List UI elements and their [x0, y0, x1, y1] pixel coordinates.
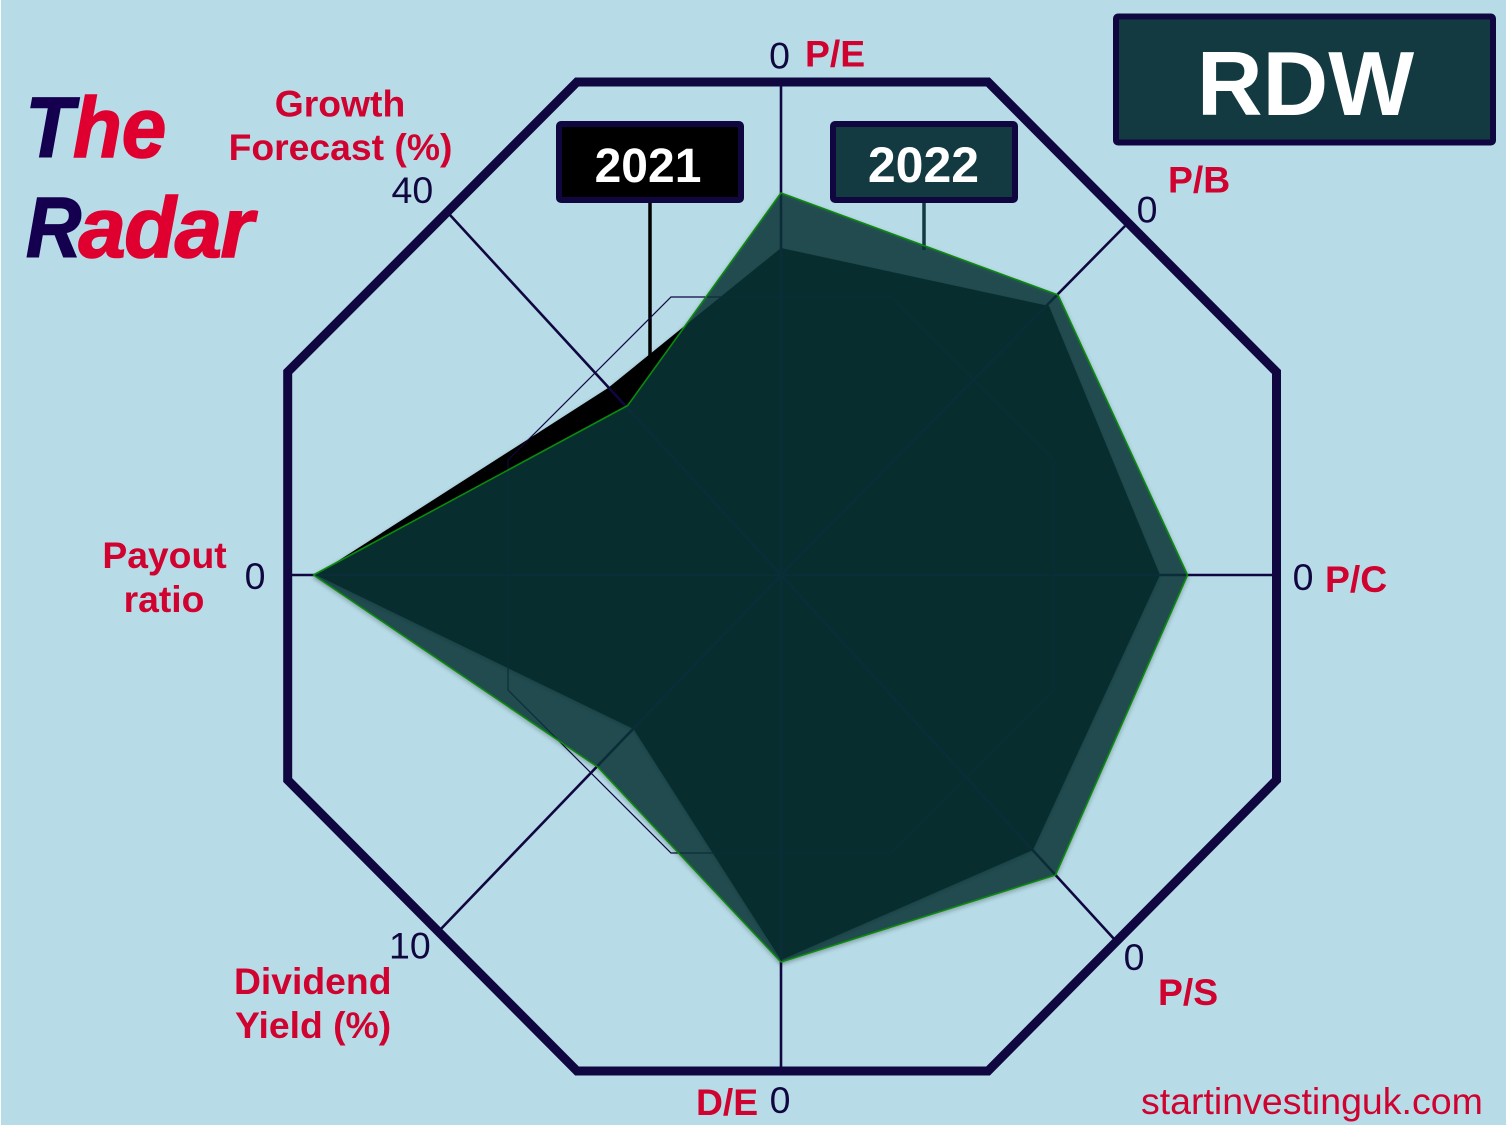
axis label: Growth Forecast: 40 — [392, 169, 433, 211]
ticker box: RDW — [1116, 16, 1493, 142]
title: The Radar: R — [26, 181, 81, 276]
axis label: P/B: P/B — [1168, 158, 1230, 200]
title: The Radar: adar — [78, 181, 257, 276]
axis label: D/E: D/E — [696, 1081, 758, 1123]
legend box: 2022: 2022 — [868, 137, 979, 193]
ticker box: RDW: RDW — [1197, 34, 1414, 135]
axis label: Dividend Yield — [234, 924, 431, 1046]
axis label: P/S: 0 — [1124, 936, 1144, 978]
axis label: Payout ratio: 0 — [245, 555, 265, 597]
axis label: P/S — [1124, 936, 1218, 1013]
title: The Radar: T — [26, 81, 79, 176]
axis label: P/C — [1293, 556, 1387, 600]
axis label: P/E: 0 — [769, 34, 790, 76]
title: The Radar — [26, 81, 257, 276]
stem: 2021 label connector — [648, 200, 652, 358]
axis label: D/E — [696, 1079, 790, 1123]
title: The Radar: he — [73, 81, 166, 176]
axis label: D/E: 0 — [770, 1079, 790, 1121]
legend box: 2021 — [559, 124, 741, 200]
axis label: Growth Forecast: Forecast (%) — [229, 126, 452, 168]
axis label: P/E — [769, 32, 865, 76]
radar series: 2021 — [316, 248, 1160, 960]
axis label: P/S: P/S — [1158, 971, 1218, 1013]
axis label: Growth Forecast: Growth — [275, 82, 405, 124]
axis label: P/C: P/C — [1325, 558, 1387, 600]
radar series: 2022 — [314, 193, 1188, 962]
legend box: 2021: 2021 — [595, 140, 701, 193]
stem: 2022 label connector — [922, 200, 926, 250]
axis label: Dividend Yield: Yield (%) — [235, 1004, 391, 1046]
axis label: Payout ratio: Payout — [102, 534, 227, 576]
axis label: Payout ratio — [102, 534, 265, 620]
axis label: P/B: 0 — [1137, 188, 1157, 230]
website credit: startinvestinguk.com — [1141, 1080, 1483, 1122]
radar outer octagon frame — [288, 82, 1276, 1071]
axis label: Growth Forecast — [229, 82, 452, 211]
axis label: P/B — [1137, 158, 1230, 230]
legend box: 2022 — [833, 124, 1015, 200]
axis label: Dividend Yield: Dividend — [234, 960, 392, 1002]
axis label: Dividend Yield: 10 — [389, 924, 431, 966]
radar inner grid octagon — [508, 297, 1054, 853]
axis label: P/C: 0 — [1293, 556, 1313, 598]
axis label: P/E: P/E — [805, 32, 865, 74]
radar axes — [288, 82, 1276, 1071]
axis label: Payout ratio: ratio — [124, 578, 204, 620]
